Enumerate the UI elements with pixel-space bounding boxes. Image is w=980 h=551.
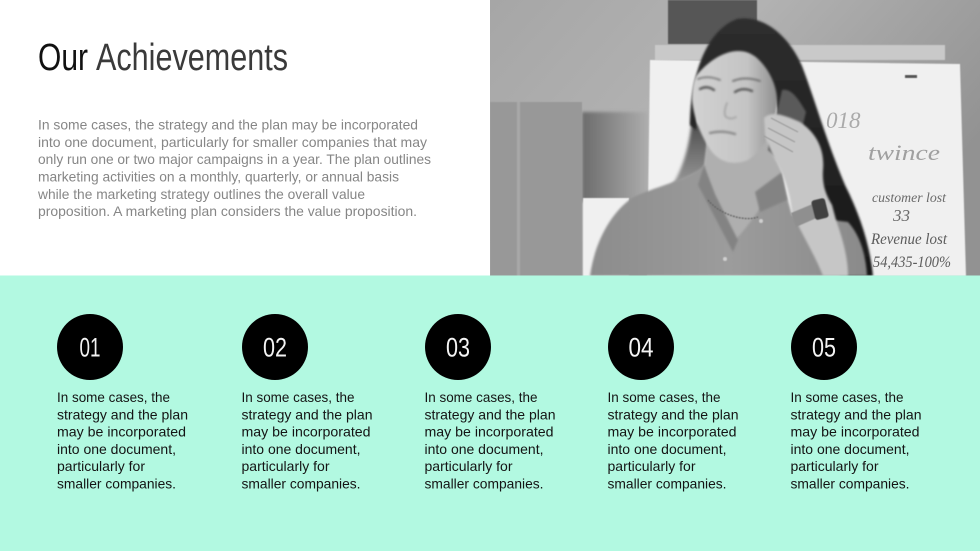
- item text 03: particularly for: [424, 458, 513, 474]
- flip chart paper: [647, 60, 966, 276]
- item text 02: into one document,: [242, 441, 360, 457]
- chart handwriting: 54,435-100%: [873, 254, 951, 271]
- item text 02: In some cases, the: [242, 389, 355, 405]
- chart handwriting: Revenue lost: [870, 231, 948, 248]
- item text 01: into one document,: [57, 441, 176, 457]
- collar: [698, 165, 787, 252]
- intro paragraph: into one document, particularly for smaller companies that may: [38, 134, 427, 150]
- number badge 03: 03: [446, 332, 470, 362]
- number badge 04: 04: [628, 332, 654, 362]
- pillar: [668, 0, 757, 44]
- long hair, lighter strand at left: [672, 122, 708, 182]
- item 01: [57, 314, 188, 492]
- item text 04: into one document,: [608, 441, 726, 457]
- mint panel: [0, 276, 980, 551]
- item text 05: [790, 389, 922, 492]
- chart handwriting: twince: [868, 140, 940, 165]
- item text 01: strategy and the plan: [57, 406, 188, 422]
- phone: [767, 89, 806, 156]
- item text 03: smaller companies.: [424, 476, 544, 492]
- item 03: [424, 314, 556, 492]
- item text 02: particularly for: [242, 458, 330, 474]
- item text 03: into one document,: [424, 441, 544, 457]
- item 04: [608, 314, 738, 492]
- hair: [690, 18, 873, 276]
- item text 04: strategy and the plan: [608, 406, 738, 422]
- neck: [704, 135, 782, 240]
- item text 01: In some cases, the: [57, 389, 170, 405]
- item text 05: strategy and the plan: [790, 406, 922, 422]
- intro paragraph: proposition. A marketing plan considers the value proposition.: [38, 203, 417, 219]
- number badge 04: [608, 314, 674, 380]
- number badge 05: [791, 314, 857, 380]
- item text 04: may be incorporated: [608, 424, 736, 440]
- photo: woman on the phone in front of a flip chart: [490, 0, 980, 276]
- number badge 01: [57, 314, 123, 380]
- number badge 05: 05: [812, 332, 836, 362]
- eyes and brows: [698, 77, 760, 134]
- title: Achievements: [96, 37, 288, 79]
- item 02: [242, 314, 372, 492]
- intro paragraph: In some cases, the strategy and the plan may be incorporated: [38, 116, 418, 132]
- number badge 03: [425, 314, 491, 380]
- intro paragraph: only run one or two major campaigns in a year. The plan outlines: [38, 151, 431, 167]
- item text 05: smaller companies.: [790, 476, 910, 492]
- item text 04: smaller companies.: [608, 476, 726, 492]
- item text 03: In some cases, the: [424, 389, 538, 405]
- intro paragraph: marketing activities on a monthly, quarterly, or annual basis: [38, 168, 399, 184]
- chart handwriting: 018: [826, 108, 861, 133]
- intro paragraph: [37, 116, 431, 219]
- face: [692, 51, 777, 163]
- left white panel: [0, 0, 490, 276]
- shirt: [590, 165, 867, 276]
- necklace: [708, 200, 758, 219]
- chart handwriting: 33: [892, 206, 910, 225]
- item text 02: strategy and the plan: [242, 406, 372, 422]
- item text 03: may be incorporated: [424, 424, 554, 440]
- item text 03: [424, 389, 556, 492]
- item text 04: [608, 389, 738, 492]
- window: [583, 198, 629, 276]
- number badge 02: 02: [263, 332, 287, 362]
- item text 02: may be incorporated: [242, 424, 370, 440]
- item text 05: may be incorporated: [790, 424, 920, 440]
- shirt buttons: [723, 219, 763, 261]
- cabinet shadow: [582, 112, 648, 202]
- intro paragraph: while the marketing strategy outlines the overall value: [37, 186, 365, 202]
- clip on chart: [905, 75, 917, 78]
- number badge 01: 01: [80, 332, 100, 362]
- item text 05: particularly for: [790, 458, 879, 474]
- cabinet: [490, 102, 582, 276]
- chart handwriting: [826, 108, 951, 271]
- item text 04: In some cases, the: [608, 389, 721, 405]
- wall: [490, 0, 980, 276]
- chart handwriting: customer lost: [872, 191, 947, 206]
- item 05: [790, 314, 922, 492]
- title: [38, 37, 288, 79]
- item text 05: into one document,: [790, 441, 910, 457]
- watch: [791, 198, 829, 227]
- item text 01: [57, 389, 188, 492]
- item text 04: particularly for: [608, 458, 696, 474]
- flip chart board: [655, 45, 945, 60]
- finger lines: [764, 118, 798, 152]
- item text 05: In some cases, the: [790, 389, 904, 405]
- item text 02: smaller companies.: [242, 476, 360, 492]
- hand and forearm: [764, 114, 848, 276]
- item text 02: [242, 389, 372, 492]
- item text 03: strategy and the plan: [424, 406, 556, 422]
- number badge 02: [242, 314, 308, 380]
- item text 01: may be incorporated: [57, 424, 186, 440]
- title: Our: [38, 37, 88, 79]
- item text 01: smaller companies.: [57, 476, 176, 492]
- item text 01: particularly for: [57, 458, 145, 474]
